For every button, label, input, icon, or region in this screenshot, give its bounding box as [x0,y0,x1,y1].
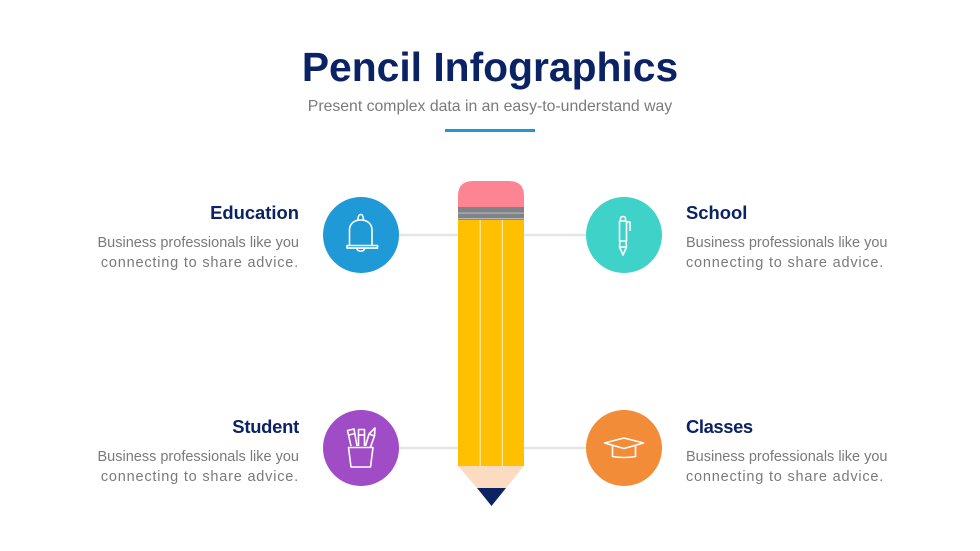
eraser [458,181,524,207]
title underline [445,129,535,132]
description [98,449,299,485]
graphite point [477,488,506,506]
description: connecting to share advice. [101,469,299,485]
connector lines [395,235,590,448]
text block: Student [98,416,300,485]
description: Business professionals like you [686,235,888,251]
icon: cup of pencils [323,410,399,486]
title: Pencil Infographics [302,44,678,90]
description: connecting to share advice. [686,255,884,271]
description: connecting to share advice. [101,255,299,271]
heading: Student [232,416,299,437]
description [98,235,299,271]
description [686,449,888,485]
ferrule [458,207,524,220]
icon: pen [586,197,662,273]
heading: Classes [686,416,753,437]
text block: Classes [686,416,888,485]
description [686,235,888,271]
description: Business professionals like you [98,235,299,251]
icon: graduation cap [586,410,662,486]
text block: School [686,202,888,271]
description: Business professionals like you [98,449,299,465]
pencil [458,181,524,506]
description: Business professionals like you [686,449,888,465]
text block: Education [98,202,299,271]
pencil body [458,220,524,466]
description: connecting to share advice. [686,469,884,485]
wood tip [458,466,524,488]
heading: School [686,202,747,223]
heading: Education [210,202,299,223]
subtitle: Present complex data in an easy-to-understand way [308,98,672,115]
icon: bell [323,197,399,273]
